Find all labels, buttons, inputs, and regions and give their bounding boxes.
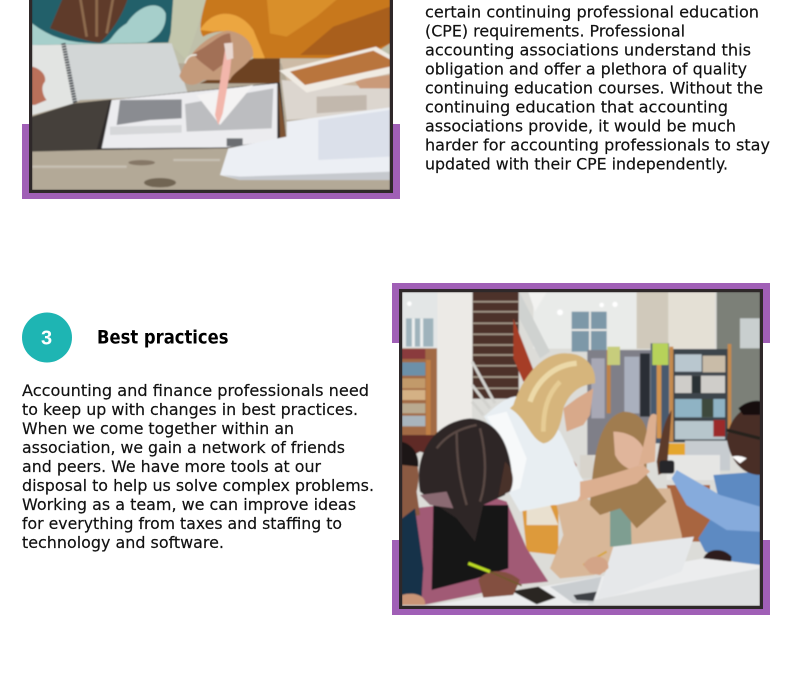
hand and ring: [179, 31, 253, 85]
pillar: [437, 292, 472, 432]
purple photo backing: [22, 124, 400, 199]
orange sweater: [200, 0, 390, 60]
stylus: [215, 43, 233, 125]
photo: colleagues high-fiving in a library: [402, 292, 760, 606]
body text: continuing education: (CPE) requirements. Professional: [425, 22, 685, 40]
open magazine: [97, 83, 286, 150]
number badge 3: 3: [41, 328, 52, 350]
phone: [512, 587, 556, 604]
heading: best practices: Best practices: [97, 326, 228, 348]
desk with laptop at back: [685, 441, 730, 471]
teacher: arm and high-five hand: [580, 414, 657, 502]
tablet: [279, 47, 390, 93]
wood knots: [128, 160, 155, 165]
body text: continuing education: updated with their CPE independently.: [425, 154, 728, 174]
hands and pencils: [478, 571, 520, 598]
white paper stack: [220, 107, 390, 180]
center bookshelves: [587, 350, 651, 455]
papers under tablet: [282, 80, 390, 120]
backdrop: [149, 12, 390, 64]
central desk: [522, 504, 560, 556]
teacher: shirt: [484, 396, 586, 512]
panel: section 2 photo frame: [22, 0, 400, 199]
white table: [427, 558, 760, 606]
laptop: [550, 577, 602, 603]
body text: continuing education: accounting associations understand this: [425, 40, 751, 60]
folder top: [200, 58, 280, 83]
dark photo border: [399, 289, 763, 609]
man's arm and raised hand: [657, 410, 672, 475]
partly visible person far left: [402, 464, 420, 520]
body text: best practices: and peers. We have more tools at our: [22, 457, 321, 476]
body text: best practices: disposal to help us solve complex problems.: [22, 476, 374, 495]
photo: hands over documents on a wooden table: [32, 0, 390, 190]
body text: best practices: [22, 381, 374, 552]
body text: continuing education: associations provide, it would be much: [425, 116, 736, 136]
body text: continuing education: certain continuing professional education: [425, 2, 759, 22]
body text: best practices: Accounting and finance professionals need: [22, 381, 369, 400]
right bookshelf: [669, 349, 731, 442]
man on right: [698, 472, 760, 565]
dark folder: [32, 99, 112, 152]
body text: continuing education: continuing education courses. Without the: [425, 78, 763, 98]
teacher: hair and face: [563, 388, 593, 432]
body text: best practices: technology and software.: [22, 533, 224, 552]
notebook: [64, 42, 188, 102]
body text: continuing education: continuing education that accounting: [425, 98, 728, 116]
body text: best practices: to keep up with changes in best practices.: [22, 400, 358, 419]
seated woman with long hair: [550, 488, 683, 578]
seated woman left: [413, 498, 548, 605]
body text: best practices: for everything from taxes and staffing to: [22, 514, 342, 533]
panel: section 3 text: [22, 312, 374, 552]
stairs: [473, 292, 519, 399]
body text: best practices: When we come together within an: [22, 419, 294, 438]
body text: continuing education: harder for accounting professionals to stay: [425, 136, 770, 154]
ceiling and windows: [533, 292, 640, 349]
body text: best practices: Working as a team, we can improve ideas: [22, 495, 356, 514]
body text: best practices: association, we gain a network of friends: [22, 438, 345, 457]
body text: continuing education: [425, 2, 770, 174]
number badge 3: [22, 312, 72, 362]
panel: section 3 photo frame: [392, 283, 770, 615]
dark photo border: [29, 0, 393, 193]
left bookshelf: [402, 348, 437, 435]
purple corner brackets: [392, 283, 770, 615]
body text: continuing education: obligation and offer a plethora of quality: [425, 60, 747, 78]
